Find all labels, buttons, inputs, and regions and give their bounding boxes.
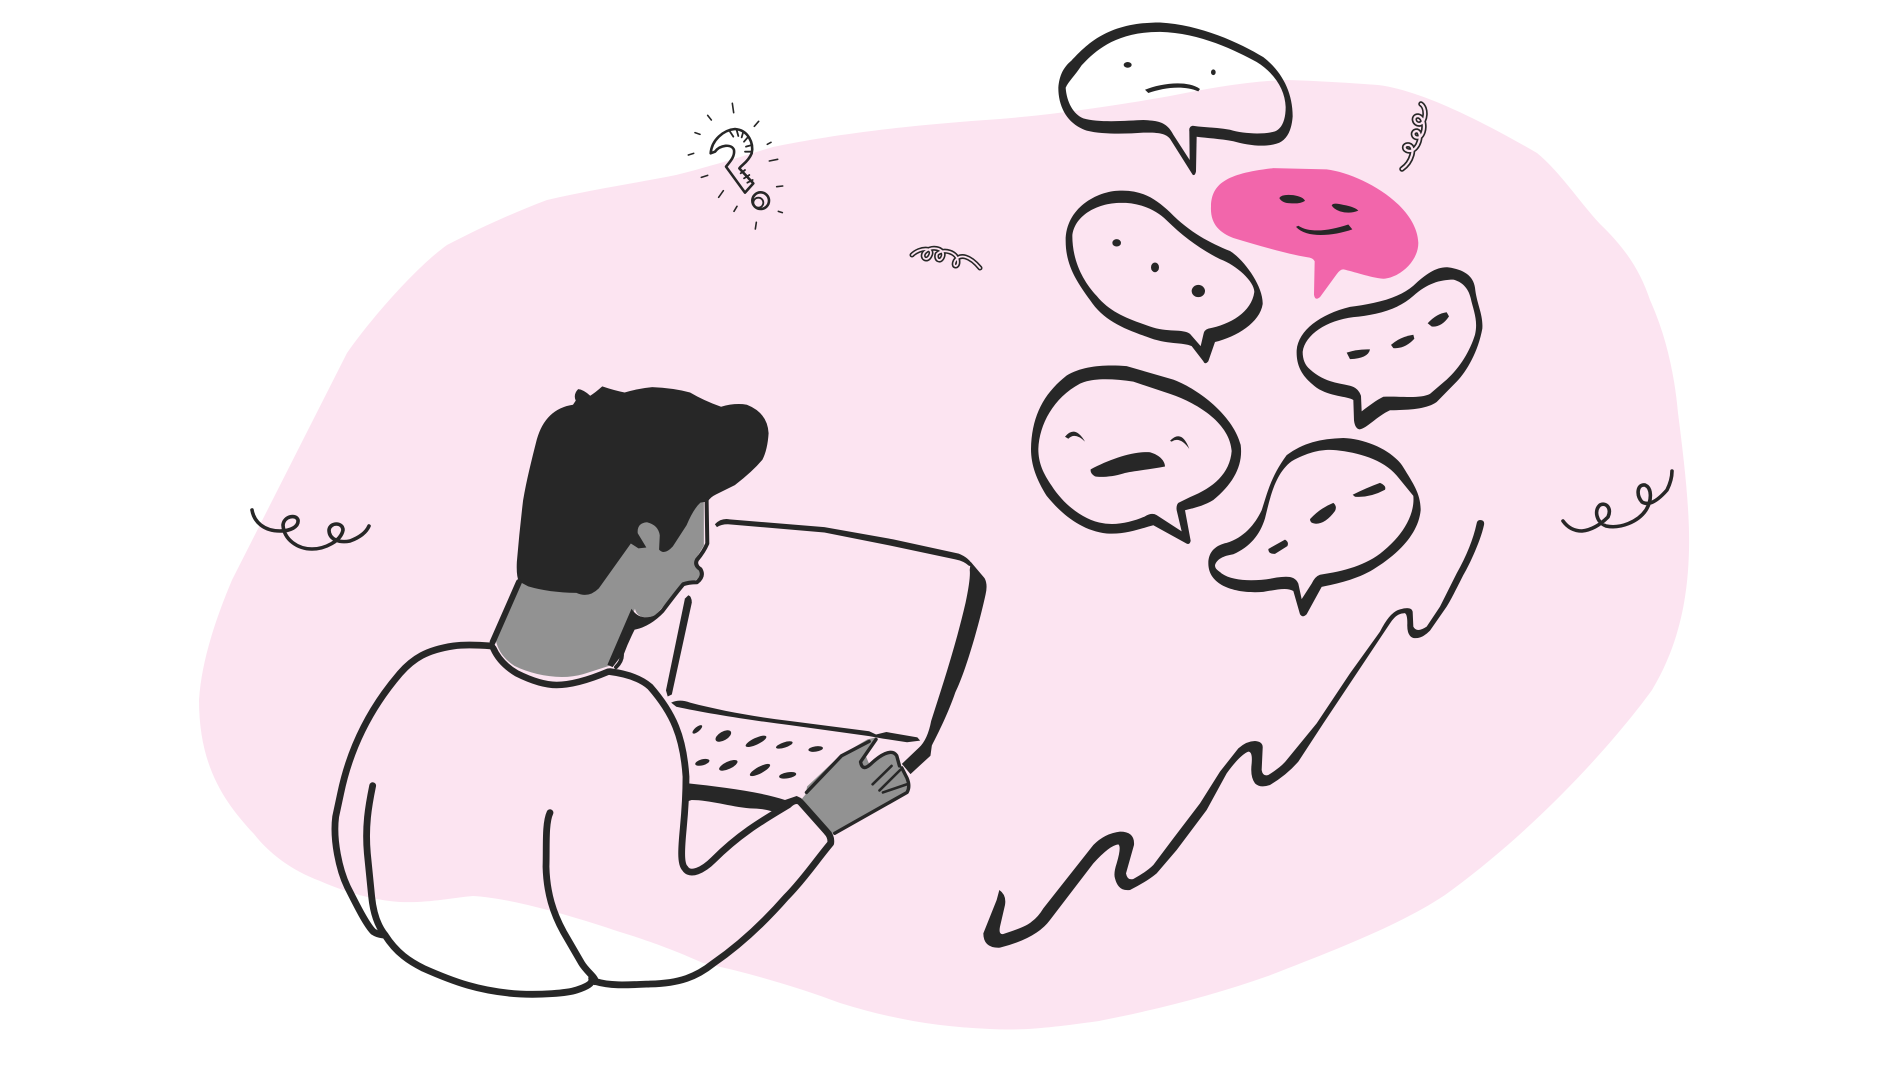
laptop screen top edge bbox=[715, 519, 973, 566]
bubble: pink, smiling bbox=[1211, 168, 1418, 299]
chin shadow bbox=[607, 609, 664, 667]
bubble: top, frowning bbox=[1058, 22, 1293, 175]
laptop screen right edge bbox=[902, 562, 987, 774]
icon: question mark with sparks bbox=[688, 103, 783, 229]
icon: curl at left bbox=[252, 510, 369, 549]
laptop screen left edge bbox=[666, 595, 692, 697]
hair bbox=[517, 386, 769, 595]
face profile outline bbox=[616, 501, 707, 667]
icon: curl at upper right bbox=[1402, 104, 1425, 169]
person with laptop bbox=[335, 386, 987, 994]
neck line bbox=[493, 582, 519, 642]
right arm outline bbox=[596, 672, 831, 985]
hand bbox=[802, 737, 909, 835]
icon: curl at right bbox=[1563, 471, 1672, 531]
torso outline bbox=[335, 645, 592, 994]
zigzag trail line bbox=[983, 520, 1484, 948]
icon: small curl near question mark bbox=[912, 248, 980, 268]
laptop keyboard top edge bbox=[671, 701, 920, 742]
face and neck bbox=[496, 501, 704, 677]
speech bubbles cluster bbox=[1031, 22, 1482, 616]
laptop base bbox=[687, 783, 802, 812]
keyboard keys bbox=[691, 724, 823, 780]
head, hair and laptop screen bbox=[496, 386, 987, 835]
bubble: left, open mouth bbox=[1031, 365, 1241, 544]
bubble: three dots bbox=[1066, 191, 1263, 363]
left sleeve line bbox=[367, 786, 385, 935]
body outline and keys bbox=[335, 582, 831, 994]
bubble: right, three dashes bbox=[1297, 267, 1482, 429]
back crease line bbox=[546, 813, 595, 982]
background pink blob bbox=[199, 80, 1689, 1030]
bubble: lower, three slanted dashes bbox=[1208, 438, 1421, 616]
collar bbox=[493, 648, 608, 685]
